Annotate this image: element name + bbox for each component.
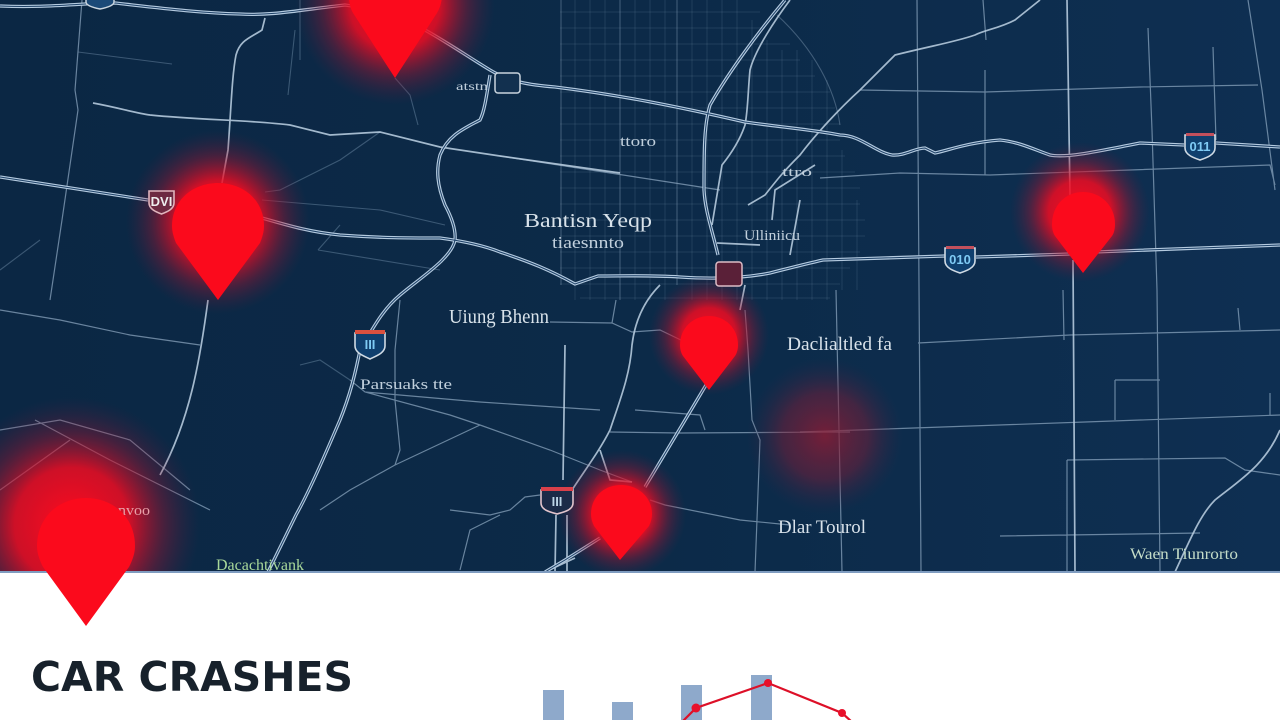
chart: bars and trend line — [543, 675, 852, 720]
label: district: Parsuaks tte — [360, 377, 452, 393]
label: city name: Bantisn Yeqp — [524, 210, 652, 232]
shield: central west — [355, 330, 385, 359]
pin: west — [172, 183, 264, 300]
label: east suburb: Daclialtled fa — [787, 334, 893, 355]
label: west suburb: Uiung Bhenn — [449, 306, 549, 328]
label: north grid: ttoro — [620, 134, 656, 150]
shield: downtown — [716, 262, 742, 286]
map bottom edge — [0, 571, 1280, 573]
shield: east middle: 010 — [949, 252, 971, 267]
shield: west — [149, 191, 174, 214]
highways — [0, 0, 1280, 572]
label: bottom green: Dacachtivank — [216, 557, 304, 574]
map pins inside map — [172, 0, 1115, 560]
pin: top — [349, 0, 442, 78]
shield: east top — [1185, 133, 1215, 160]
shield: south — [541, 487, 573, 514]
label: south-east corner: Waen Tiunrorto — [1130, 546, 1238, 563]
shield: south: III — [552, 494, 562, 509]
pin: bottom left, overlapping the white panel — [37, 498, 135, 626]
highway shields — [86, 0, 1215, 514]
label: city subname: tiaesnnto — [552, 233, 624, 252]
map place labels — [118, 79, 1238, 574]
shield: west: DVI — [151, 194, 172, 209]
heat glows — [0, 0, 1146, 571]
label: bottom left: nvoo — [118, 503, 150, 519]
label: south east: Dlar Tourol — [778, 517, 866, 538]
secondary roads — [93, 0, 1075, 572]
city street grid — [560, 0, 865, 300]
trend line — [682, 679, 852, 720]
label: downtown: Ulliniicu — [744, 228, 801, 244]
shield: central west: III — [365, 337, 375, 352]
shield: top centre — [495, 73, 520, 93]
label: top-centre interchange: atstn — [456, 79, 488, 93]
pin: south — [591, 485, 652, 560]
shield: east top: 011 — [1190, 139, 1210, 154]
shield: top left — [86, 0, 114, 9]
minor roads — [0, 0, 1280, 572]
pin: east — [1052, 192, 1115, 273]
label: north east grid: ttro — [782, 164, 812, 179]
shield: east middle — [945, 246, 975, 273]
bars — [543, 675, 772, 720]
pin: centre — [680, 316, 738, 390]
panel: dark city map — [0, 0, 1280, 571]
title: CAR CRASHES — [31, 653, 353, 701]
